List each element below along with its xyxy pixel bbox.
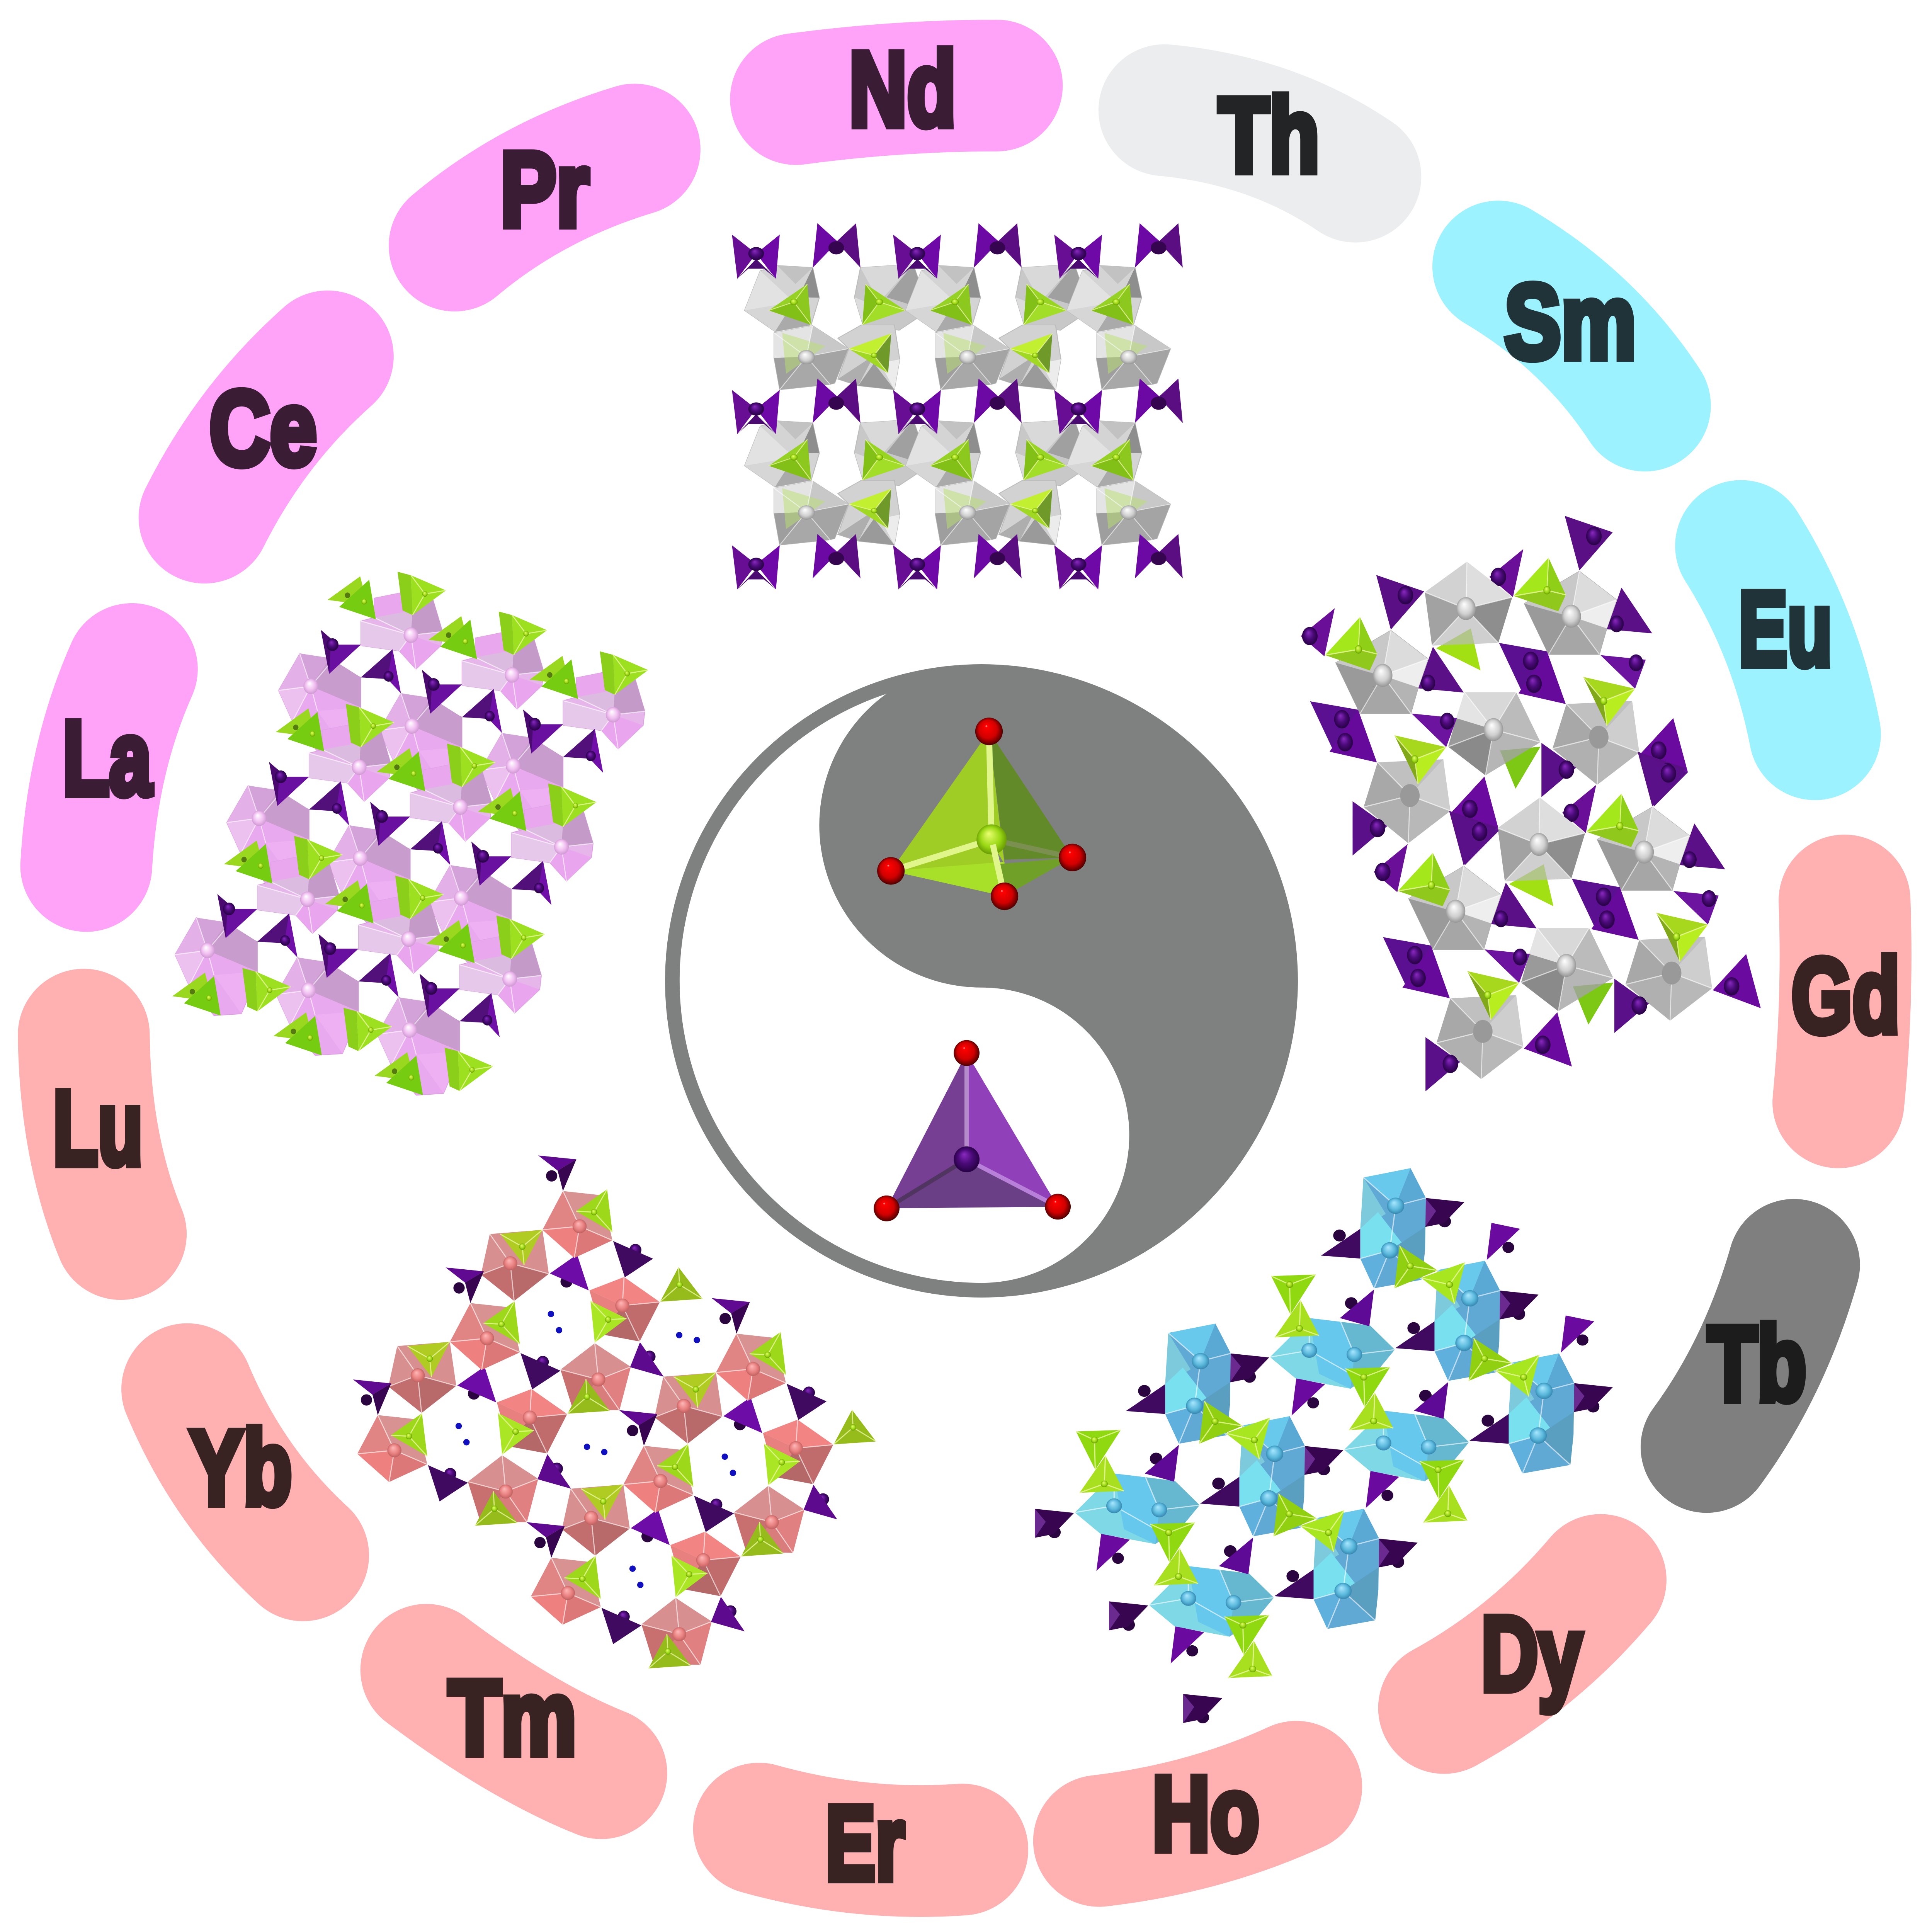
pill: La: [63, 669, 152, 866]
panel: lower-left crystal structure (salmon polyhedra): [353, 1155, 876, 1668]
pill: Ce: Ce: [209, 369, 317, 488]
panel: right crystal structure (grey polyhedra): [1301, 516, 1761, 1091]
pill: Lu: Lu: [53, 1069, 143, 1187]
pill: Th: Th: [1219, 77, 1320, 194]
pill: Yb: Yb: [190, 1409, 292, 1527]
pill: Eu: Eu: [1738, 570, 1832, 688]
pill: Tb: [1707, 1265, 1806, 1447]
pill: Gd: [1792, 900, 1900, 1102]
pill: Lu: [53, 1035, 143, 1234]
pill: Pr: Pr: [500, 131, 589, 249]
pill: Yb: [187, 1389, 303, 1555]
pill: Tb: Tb: [1708, 1305, 1806, 1423]
central yin-yang with two tetrahedra: [665, 664, 1298, 1298]
pill: Th: [1164, 77, 1355, 194]
pill: Ho: Ho: [1152, 1755, 1259, 1873]
purple tetrahedron: [874, 1040, 1071, 1221]
pill: Dy: Dy: [1481, 1595, 1583, 1713]
blue water dots: [456, 1311, 736, 1588]
pill: Pr: [455, 131, 634, 249]
panel: lower-right crystal structure (blue polyhedra): [1035, 1168, 1613, 1723]
pill: Ce: [204, 356, 328, 518]
pill: Sm: [1498, 263, 1645, 406]
pill: Eu: [1738, 546, 1832, 734]
pill: Er: Er: [826, 1784, 905, 1903]
pill: Er: [759, 1784, 962, 1903]
pill: Dy: [1444, 1580, 1600, 1713]
yin-yang symbol: [665, 664, 1298, 1298]
panel: top crystal structure (grey polyhedra): [732, 223, 1183, 589]
pill: Tm: Tm: [449, 1659, 577, 1777]
panel: left crystal structure (pink polyhedra): [172, 572, 648, 1095]
pill: Nd: Nd: [849, 30, 956, 148]
green tetrahedron: [877, 718, 1086, 910]
pill: Sm: Sm: [1505, 263, 1636, 381]
pill: La: La: [63, 699, 152, 817]
